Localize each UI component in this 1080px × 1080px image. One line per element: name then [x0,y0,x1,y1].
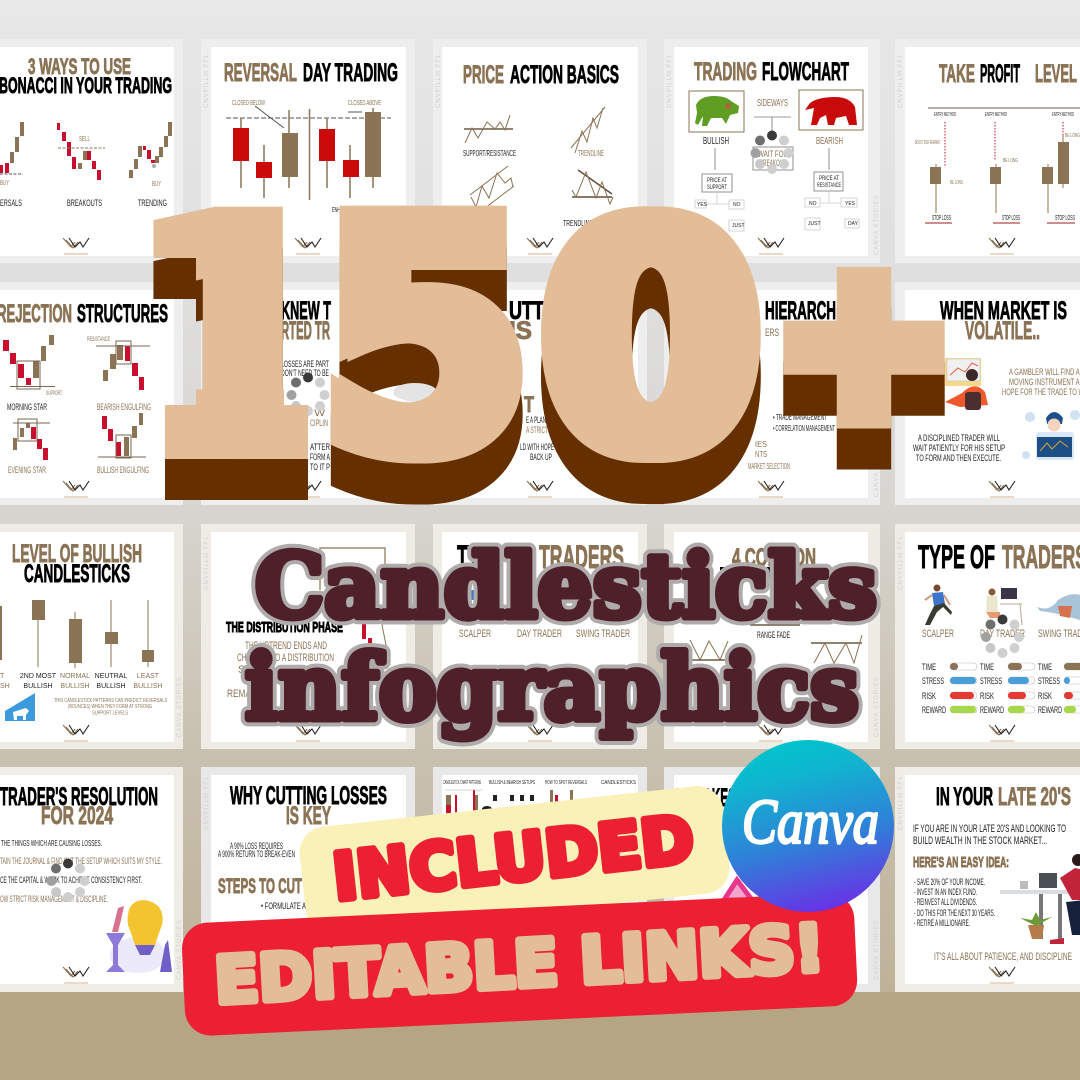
frame watermarks: CNVPILLM FF1 [204,536,210,590]
subheading: HERE'S AN EASY IDEA: [913,854,1009,871]
number face: 5 [325,153,534,525]
frame watermarks: CANVA STORIES [177,919,183,980]
flowchart: DAY [848,221,859,227]
body text [520,392,554,462]
icon: trader with laptop [1022,410,1080,460]
card title: ERS [765,327,779,339]
loss text: A 900% RETURN TO BREAK-EVEN [218,849,295,859]
card: mini charts sheet [433,767,647,992]
range charts [690,625,862,663]
frame watermarks: CNVPILLM FF1 [204,776,210,830]
range charts: RANGE FADE [757,630,790,640]
card: when market is volatile [895,282,1080,505]
card title: UTTI [509,297,549,325]
frame watermarks: CANVA STORIES [874,194,880,255]
outline layer: Candlesticks [255,534,877,638]
flowchart: SUPPORT [707,185,727,191]
caption: (BOUNCES) WHEN THEY FORM AT STRONG [68,704,152,710]
body text: T [524,392,534,417]
badge: canva logo [722,740,894,912]
badge: included [297,783,732,937]
reversal candles: ENHANCED DROP DAY [332,207,375,214]
icon: pink triangle [724,880,752,900]
card title: FLOWCHART [762,58,849,86]
body text: E A PLAN [526,415,546,425]
rejection candle patterns: MORNING STAR [7,402,47,412]
candlestick charts: BUY [0,180,9,187]
card title [281,297,331,345]
bullet list: NTS [755,450,767,459]
card title [765,297,836,339]
logo [527,725,553,741]
take profit candles: ENTRY METHOD [985,112,1007,118]
card title: IS [509,317,532,345]
body text: ONLY W [281,408,326,418]
flowchart: RESISTANCE [817,183,841,189]
stat labels: RISK [980,691,994,701]
card: 4 common range patterns [664,524,880,749]
number shadow: 5 [317,194,526,566]
card: 3 ways to use fibonacci [0,39,183,263]
resolutions list: TAIN THE JOURNAL & FIND OUT THE SETUP WHICH SUITS MY STYLE. [0,856,162,866]
trader labels: SCALPER [922,628,954,640]
card title [0,783,158,830]
card: mistakes [664,767,880,992]
reversal candles: CLOSED ABOVE [348,100,381,107]
price action line charts [463,107,613,228]
logo [295,725,321,741]
price action line charts: TRENDLINE [578,149,604,158]
number shadow [153,246,945,504]
fill layer: Candlesticks [255,534,877,638]
candle levels: BULLISH [133,683,163,690]
idea list: - REINVEST ALL DIVIDENDS. [914,897,977,907]
take profit candles: STOP LOSS [932,215,951,222]
logo [63,725,89,741]
card title: FOR 2024 [41,802,113,830]
card title: CANDLESTICKS [24,560,130,588]
number shadow: 5 [325,194,534,566]
flowchart: JUST [808,221,820,227]
take profit candles: ENTRY METHOD [934,112,956,118]
card: level of bullish candlesticks [0,524,183,749]
candle levels: T [0,673,5,680]
take profit candles: BE LONG [950,180,963,186]
stat labels: STRESS [980,676,1002,686]
card title [12,540,142,588]
card: type of traders [895,524,1080,749]
gambler and disciplined text: WAIT PATIENTLY FOR HIS SETUP [913,443,1005,453]
frame watermarks: CNVPILLM FF1 [204,54,210,108]
logo [989,238,1015,254]
flowchart: BULLISH [703,136,729,147]
card title: PRICE [463,61,504,89]
body text [281,359,330,472]
candle levels: SH [0,683,10,690]
card title: IN YOUR [936,783,993,811]
outline layer: infographics [245,635,859,741]
badge: editable links [181,892,858,1037]
reversal candles: NORMAL DIRECT DAY [233,207,277,214]
icon: green bull [689,91,744,132]
logo [63,481,89,497]
included text: INCLUDED [330,803,697,916]
mini charts: BULLISH & BEARISH SETUPS [489,780,535,786]
card title [720,544,816,577]
flowchart: NO [733,202,741,208]
rejection candle patterns: RESISTANCE [87,337,110,343]
idea list: - SAVE 20% OF YOUR INCOME. [914,877,985,887]
logo [63,238,89,254]
price action line charts: SUPPORT/RESISTANCE [463,149,516,158]
body text [227,640,334,700]
flowchart: PRICE AT [819,176,839,182]
card title: STRUCTURES [77,300,168,328]
icon: day trader at desk [986,588,1022,625]
candle levels: BULLISH [23,683,53,690]
resolutions list: THE THINGS WHICH ARE CAUSING LOSSES. [1,839,102,848]
candle levels: 2ND MOST [20,673,57,680]
mini charts: CANDLESTICK CHART PATTERNS [443,780,481,786]
body text: A STRICT [526,425,548,435]
candle levels: NORMAL [60,673,90,680]
caption: SUPPORT LEVELS [92,710,129,716]
candle levels: LEAST [137,673,160,680]
body text: THE UPTREND ENDS AND [245,640,327,652]
big number 150+ [153,206,945,504]
flowchart: YES [697,202,708,208]
flowchart: PRICE AT [707,178,727,184]
card: rejection structures [0,282,183,505]
number face: + [776,218,952,464]
loss text [218,841,295,859]
frame watermarks: CANVA STORIES [177,676,183,737]
card title: TRADER'S RESOLUTION [0,783,158,811]
logo [989,967,1015,983]
number shadow: 0 [548,199,766,564]
card title: HIERARCH [765,297,836,325]
resolutions list: OW STRICT RISK MANAGEMENT & DISCIPLINE. [0,894,108,904]
stat labels: TIME [922,662,936,672]
logo [527,238,553,254]
trader labels [922,628,1080,640]
body text: S [238,664,245,676]
idea list: - INVEST IN AN INDEX FUND. [914,887,977,897]
take profit candles: BE LONG [1003,158,1018,164]
candle levels: BULLISH [96,683,126,690]
icon: scalper runner [925,584,952,625]
card title: REJECTION [0,300,72,328]
distribution chart [320,548,390,723]
flowchart: BREAKOUT [760,158,786,168]
body text: TO IT P [310,462,330,472]
body text: LD WITH HOPE [520,442,554,452]
rejection candle patterns: BULLISH ENGULFING [97,465,149,475]
frame watermarks: CNVPILLM FF1 [898,776,904,830]
flowchart: WAIT FOR [758,149,788,159]
icon: red bear [799,90,863,130]
card title: IS KEY [286,802,331,830]
trader labels [459,590,630,640]
fill layer: infographics [245,635,859,741]
icon: swing trader resting [1037,594,1080,620]
card: hierarchy [664,282,880,505]
floor [0,992,1080,1080]
stat labels: TIME [1038,662,1052,672]
idea list: - DO THIS FOR THE NEXT 30 YEARS. [914,908,995,918]
intro text [913,823,1066,847]
stat labels: STRESS [922,676,944,686]
steps heading: STEPS TO CUT [218,875,302,898]
frame watermarks [177,54,904,980]
candlestick charts: TRENDING [138,198,167,208]
card title: 3 WAYS TO USE [28,54,131,79]
frame watermarks: CNVPILLM FF1 [898,536,904,590]
candlestick charts: ERSALS [0,198,22,208]
card: types of traders [433,524,647,749]
stat pills [950,663,1080,713]
counter highlight of the 5 [393,383,437,401]
trader labels: SCALPER [459,628,491,640]
card: price action basics [433,39,647,263]
number shadow: + [776,260,952,504]
number face: 0 [536,158,754,523]
stat labels: RISK [1038,691,1052,701]
bullet list: • TRADE MANAGEMENT [773,413,827,422]
card: trading flowchart [664,39,880,263]
frame watermarks: CANVA STORIES [874,676,880,737]
body text: REMA [227,688,252,700]
card title: BONACCI IN YOUR TRADING [0,73,172,98]
flowchart: NO [809,201,817,207]
trader labels: DAY TRADER [980,628,1025,640]
candle levels: NEUTRAL [95,673,127,680]
card title: WHY CUTTING LOSSES [230,782,387,810]
number shadow: 1 [135,203,337,558]
reversal candles [226,100,391,214]
outline layer [245,534,877,741]
idea list [914,877,995,928]
icon: analyst at desk [945,358,988,410]
number face [153,206,945,464]
candlestick charts: BUY [152,181,161,188]
idea list: - RETIRE A MILLIONAIRE. [914,918,970,928]
take profit candles [915,108,1080,223]
card title [230,782,387,830]
gambler and disciplined text [913,367,1080,463]
card title: 4 COMMON [732,544,816,572]
icon: person working at desk [1000,854,1080,944]
canva wordmark: Canva [742,786,879,857]
stat labels: STRESS [1038,676,1060,686]
number shadow: 0 [536,199,754,564]
card title: TYPE OF [918,539,995,575]
bullet list: • CORRELATION MANAGEMENT [773,424,835,433]
logo [989,725,1015,741]
stat labels: REWARD [980,705,1004,715]
bullet list: MARKET SELECTION [748,462,790,471]
logo [295,238,321,254]
card title [0,54,172,98]
stat labels: REWARD [922,705,946,715]
card: take profit level [895,39,1080,263]
flowchart: BEARISH [816,136,843,147]
body text: DON'T NEED TO BE [281,368,329,378]
mini charts: CANDLESTICKS [601,780,637,786]
stat labels: TIME [980,662,994,672]
loading spinners [46,130,1024,902]
flowchart [695,98,859,231]
card title: TAKE [939,60,975,88]
card: i knew then: RTED TR [281,317,330,345]
candlestick charts: BREAKOUTS [67,198,102,208]
loss text: A 90% LOSS REQUIRES [230,841,283,851]
card title: PROFIT [980,60,1020,88]
fill layer [245,534,877,741]
body text: CHANGES TO A DISTRIBUTION [237,652,334,664]
frame watermarks: CNVPILLM FF1 [436,54,442,108]
rejection candle patterns: EVENING STAR [8,465,46,475]
card title: TRADING [694,58,757,86]
rejection candle patterns: BEARISH ENGULFING [97,402,151,412]
card title: TYPE OF [457,539,531,575]
body text: ATTER [310,442,330,452]
resolutions list: CE THE CAPITAL & WORK TO ACHIEVE CONSISTENCY FIRST. [0,875,142,885]
heading: THE DISTRIBUTION PHASE [226,619,343,636]
rejection candle patterns [3,335,151,475]
card title: KNEW T [281,297,331,325]
price action line charts: TRENDLINE [563,219,593,228]
candlestick charts [0,122,172,208]
caption: THIS CANDLESTICK PATTERNS CAN PREDICT REVERSALS [54,698,168,704]
frame watermarks: CANVA STORIES [874,436,880,497]
trader labels: DAY TRADER [517,628,562,640]
body text: BACK UP [530,452,552,462]
number face: 1 [135,162,337,517]
stat labels [922,662,1062,715]
logo [527,481,553,497]
mini charts [443,780,637,820]
logo [758,238,784,254]
bullet list [748,413,835,471]
card title: ACTION BASICS [510,61,619,89]
body text: CIPLIN [310,418,328,428]
card title [463,61,619,89]
icon: puzzle light bulb [106,900,172,973]
card title: TRADERS [539,539,624,575]
body text: LOSSES ARE PART [281,359,329,369]
card title [939,60,1077,88]
card title: DAY TRADING [303,59,398,87]
resolutions list [0,839,162,904]
number face: 5 [317,153,526,525]
frame watermarks: CANVA STORIES [874,919,880,980]
logo [63,967,89,983]
card: i knew then [201,282,415,505]
icon: bull on blue triangle [5,693,35,721]
bullet list: IES [755,440,767,449]
frame watermarks: CNVPILLM FF1 [898,54,904,108]
card title: REVERSAL [224,59,297,87]
card: cutting losses [433,282,647,505]
take profit candles: BOOST RISK REWARD [915,140,940,146]
caption [54,698,168,716]
candle levels [0,600,163,690]
body text: FORM A [310,452,330,462]
gambler and disciplined text: TO FORM AND THEN EXECUTE. [916,453,1001,463]
card: mistakes: MISTAKES [676,784,736,812]
mini charts: HOW TO SPOT REVERSALS [545,780,587,786]
card: trader's resolution [0,767,183,992]
card title: LEVEL OF BULLISH [12,540,142,568]
step bullet: • FORMULATE A [261,901,306,911]
trader labels: SWING TRADER [576,628,630,640]
flowchart: YES [845,201,856,207]
take profit candles: STOP LOSS [1002,215,1020,222]
card: in your late 20's [895,767,1080,992]
headline: candlesticks infographics [245,534,877,741]
card: why cutting losses is key [201,767,415,992]
number face: 0 [548,158,766,523]
reversal candles: CLOSED BELOW [232,100,265,107]
flowchart: JUST [732,223,744,229]
logo [295,481,321,497]
logo [758,481,784,497]
rejection candle patterns: SUPPORT [46,391,62,397]
frame watermarks: CNVPILLM FF1 [667,54,673,108]
card: reversal day trading [201,39,415,263]
card title [940,297,1067,345]
candlestick charts: SELL [79,136,90,143]
logo [989,481,1015,497]
card: the distribution phase [201,524,415,749]
candle levels: BULLISH [60,683,90,690]
editable links text: EDITABLE LINKS! [213,912,826,1019]
flowchart: SIDEWAYS [757,98,788,109]
card title [509,297,549,345]
stat labels: RISK [922,691,936,701]
gambler and disciplined text: A DISCIPLINED TRADER WILL [918,433,1000,443]
stat labels: REWARD [1038,705,1062,715]
logo [758,725,784,741]
